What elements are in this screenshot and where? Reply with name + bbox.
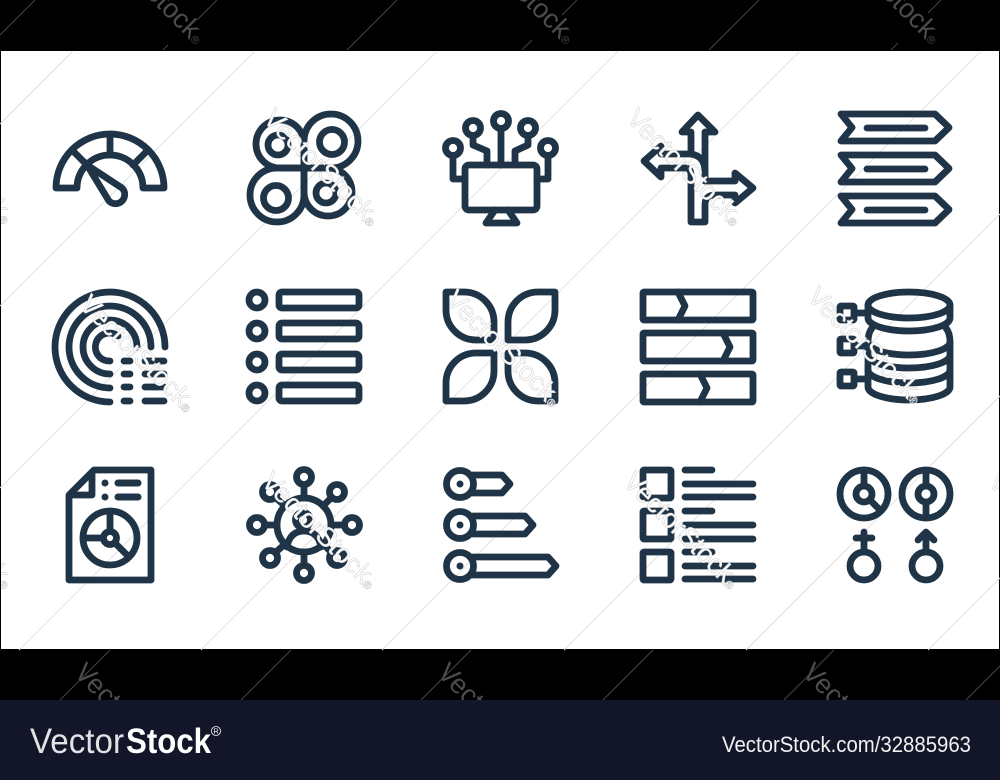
footer logo: R <box>213 728 219 736</box>
watermarks on lower black bar: VectorStock® <box>797 657 925 780</box>
footer image id: VectorStock.com/32885963 <box>722 732 971 757</box>
icon: horizontal progress bars <box>643 292 753 402</box>
icon: database with linked nodes <box>840 292 950 400</box>
footer logo <box>30 722 220 761</box>
icon: monitor with circuit nodes <box>446 114 556 223</box>
icon: checklist with text lines <box>643 470 753 580</box>
icon: radar arcs with dashes <box>55 292 165 402</box>
watermarks on white area: VectorStock® <box>618 466 746 595</box>
icon: document with pie chart <box>69 470 151 580</box>
watermarks on lower black bar: VectorStock® <box>69 657 197 780</box>
watermarks on top black bar <box>150 0 936 44</box>
icon: three-way direction arrows <box>644 115 753 222</box>
footer logo: Stock <box>126 722 211 761</box>
icon: stacked ribbon banners <box>841 114 949 223</box>
footer logo: Vector <box>30 722 124 761</box>
watermarks on white area <box>0 101 1000 595</box>
watermarks on lower black bar <box>78 661 848 700</box>
icon: speedometer gauge <box>56 134 164 204</box>
watermarks on white area: VectorStock® <box>258 103 386 232</box>
icon: four-lobed flower diagram <box>250 114 358 222</box>
watermarks on lower black bar: VectorStock® <box>432 657 560 780</box>
watermarks on white area: VectorStock® <box>802 281 930 410</box>
watermarks on white area: VectorStock® <box>621 103 749 232</box>
footer band <box>0 700 1000 780</box>
icon: user network hub <box>250 470 360 580</box>
watermarks on white area: VectorStock® <box>440 284 568 413</box>
watermarks on white area: VectorStock® <box>74 289 202 418</box>
icon: pointer labels with circles <box>446 470 556 580</box>
icon: bullet list <box>249 292 359 401</box>
watermarks on white area: VectorStock® <box>256 466 384 595</box>
icon: gender pie charts <box>840 470 950 580</box>
icon: four leaf petals <box>446 292 555 401</box>
